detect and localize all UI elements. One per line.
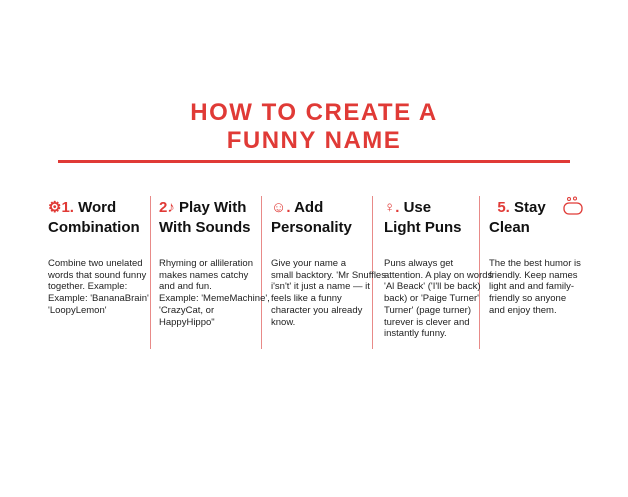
text 1: 'LoopyLemon' xyxy=(48,305,107,316)
text 3: Give your name a xyxy=(271,258,346,269)
text 1: words that sound funny xyxy=(48,270,146,281)
heading 2: 2♪ Play With xyxy=(159,199,246,216)
heading 3 xyxy=(271,199,352,236)
text 3: character you already xyxy=(271,305,362,316)
text 4: attention. A play on words xyxy=(384,270,492,281)
heading 4: Light Puns xyxy=(384,219,462,236)
heading 1 xyxy=(48,199,140,236)
panel: personality xyxy=(271,199,386,328)
text 1: Combine two unelated xyxy=(48,258,143,269)
text 3: i'sn't' it just a name — it xyxy=(271,281,370,292)
text 1: Example: 'BananaBrain' xyxy=(48,293,149,304)
heading 2: With Sounds xyxy=(159,219,251,236)
text 5: friendly. Keep names xyxy=(489,270,578,281)
text 2 xyxy=(159,258,270,328)
text 3: feels like a funny xyxy=(271,293,342,304)
text 4: turever is clever and xyxy=(384,317,470,328)
text 5: light and and family- xyxy=(489,281,574,292)
text 2: makes names catchy xyxy=(159,270,248,281)
panel: clean xyxy=(489,199,581,316)
panel: sounds xyxy=(159,199,270,328)
heading 5 xyxy=(489,199,546,236)
title: HOW TO CREATE A xyxy=(190,99,438,126)
text 4: instantly funny. xyxy=(384,328,447,339)
text 1 xyxy=(48,258,149,316)
text 4: back) or 'Paige Turner' xyxy=(384,293,479,304)
heading 3: ☺. Add xyxy=(271,199,323,216)
panel: puns xyxy=(384,199,492,339)
heading 3: Personality xyxy=(271,219,352,236)
heading 4 xyxy=(384,199,462,236)
heading 4: ♀. Use xyxy=(384,199,431,216)
text 5: The the best humor is xyxy=(489,258,581,269)
text 4: Turner' (page turner) xyxy=(384,305,471,316)
text 3: small backtory. 'Mr Snuffles xyxy=(271,270,386,281)
text 4: Puns always get xyxy=(384,258,453,269)
title xyxy=(190,99,438,154)
text 1: together. Example: xyxy=(48,281,127,292)
text 2: Rhyming or allileration xyxy=(159,258,253,269)
heading 5: 5. Stay xyxy=(497,199,546,216)
text 2: Example: 'MemeMachine', xyxy=(159,293,270,304)
heading 5: Clean xyxy=(489,219,530,236)
text 2: 'CrazyCat, or xyxy=(159,305,214,316)
text 4 xyxy=(384,258,492,339)
icon: soap xyxy=(563,196,583,215)
panel: word combination xyxy=(48,199,149,316)
text 3: know. xyxy=(271,317,295,328)
text 4: 'Al Beack' ('I'll be back) xyxy=(384,281,480,292)
text 5 xyxy=(489,258,581,316)
text 3 xyxy=(271,258,386,328)
text 2: HappyHippo" xyxy=(159,317,215,328)
heading 1: ⚙1. Word xyxy=(48,199,116,216)
title: FUNNY NAME xyxy=(227,127,401,154)
text 5: friendly so anyone xyxy=(489,293,566,304)
heading 2 xyxy=(159,199,251,236)
heading 1: Combination xyxy=(48,219,140,236)
text 5: and enjoy them. xyxy=(489,305,557,316)
text 2: and and fun. xyxy=(159,281,212,292)
